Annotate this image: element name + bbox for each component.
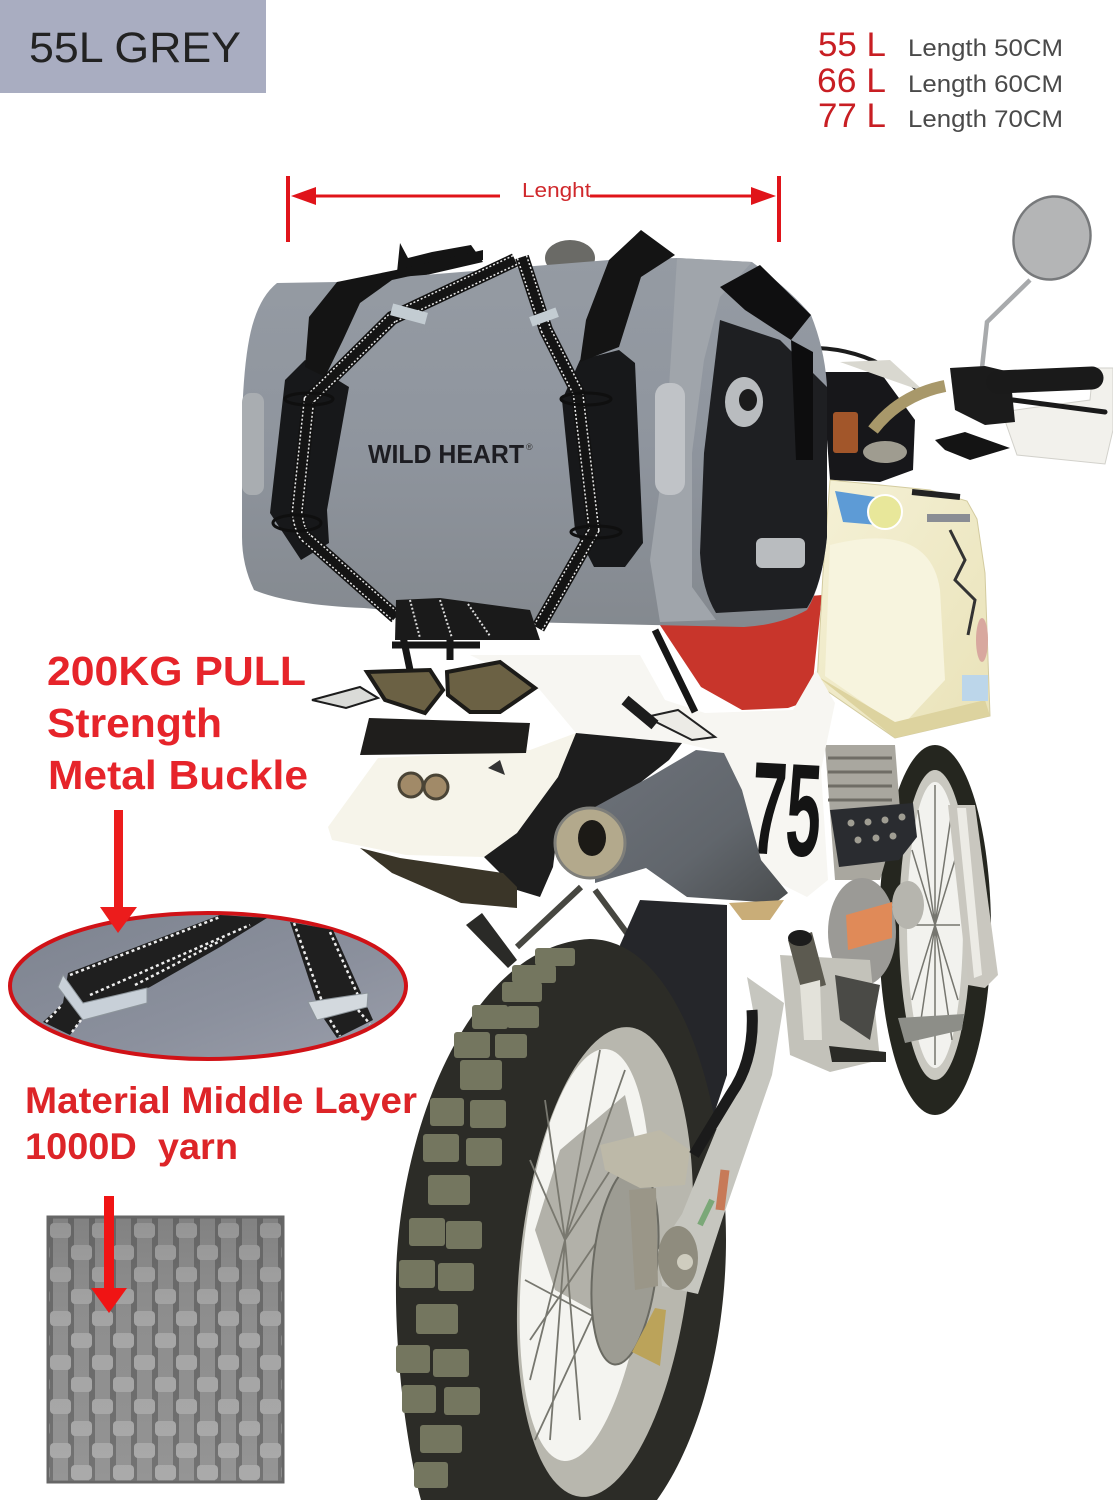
title tag: 55L GREY: 55L GREY bbox=[29, 24, 241, 72]
rear fender underside bbox=[484, 733, 682, 897]
handlebar bbox=[873, 366, 1105, 460]
callout: metal buckle heading: Strength bbox=[47, 700, 222, 746]
callout: material heading: 1000D yarn bbox=[25, 1126, 238, 1167]
rear wheel bbox=[396, 939, 726, 1500]
footpeg bbox=[898, 1014, 964, 1043]
cream fuel tank bbox=[817, 480, 990, 738]
engine bbox=[780, 745, 924, 1072]
arrow to fabric swatch bbox=[91, 1196, 127, 1313]
rear mudguard bbox=[620, 900, 727, 1150]
side window panels bbox=[655, 383, 685, 495]
size list: Length 70CM bbox=[908, 106, 1063, 133]
left top handle bbox=[396, 243, 483, 282]
cord rings bbox=[273, 393, 621, 538]
left handle strap bbox=[305, 250, 483, 377]
size list bbox=[817, 26, 1063, 135]
callout: metal buckle heading: Metal Buckle bbox=[48, 752, 308, 798]
motorcycle bbox=[312, 186, 1113, 1500]
race number 75: 75 bbox=[748, 734, 825, 885]
carrier bracket bbox=[392, 622, 695, 712]
handguard bbox=[1002, 368, 1113, 464]
buckle right bbox=[308, 993, 368, 1020]
size list: 66 L bbox=[817, 62, 886, 100]
arrow to buckle detail bbox=[100, 810, 137, 933]
lower end window bbox=[756, 538, 805, 568]
tail lights bbox=[312, 662, 715, 740]
front fork bbox=[948, 805, 998, 988]
red tank bbox=[650, 595, 822, 710]
brand logo: WILD HEART bbox=[368, 439, 524, 469]
buckle detail oval bbox=[10, 913, 406, 1059]
valve bbox=[725, 377, 763, 427]
product: dry duffel bag bbox=[242, 230, 827, 640]
licence plate holder bbox=[360, 718, 530, 755]
callout: metal buckle heading bbox=[47, 648, 308, 798]
roll-top flap bbox=[720, 265, 811, 340]
front wheel bbox=[879, 745, 991, 1115]
length dimension arrow: Lenght bbox=[522, 180, 592, 202]
side stand and frame bbox=[517, 887, 632, 947]
exhaust muffler bbox=[555, 750, 788, 920]
gauge behind bag bbox=[545, 240, 595, 276]
strap with reflective dots bbox=[43, 915, 267, 1035]
size list: Length 60CM bbox=[908, 71, 1063, 98]
white side panel bbox=[470, 655, 835, 897]
title tag: 55L GREY bbox=[0, 0, 266, 93]
right top handle bbox=[580, 230, 675, 362]
metal buckles bbox=[390, 304, 428, 324]
mirror bbox=[982, 186, 1102, 368]
elastic cords bbox=[297, 257, 594, 628]
swingarm bbox=[658, 977, 784, 1294]
woven fabric swatch bbox=[48, 1217, 283, 1482]
right webbing pad bbox=[562, 350, 643, 567]
light seam band bbox=[650, 258, 752, 622]
length dimension arrow bbox=[286, 176, 781, 242]
right strap bbox=[290, 922, 373, 1038]
size list: Length 50CM bbox=[908, 35, 1063, 62]
size list: 77 L bbox=[818, 97, 886, 135]
callout: material heading bbox=[25, 1080, 417, 1167]
brand logo: ® bbox=[526, 442, 533, 452]
size list: 55 L bbox=[818, 26, 886, 64]
bag body bbox=[242, 258, 827, 627]
callout: metal buckle heading: 200KG PULL bbox=[47, 648, 306, 694]
rear fender bbox=[328, 733, 576, 857]
buckle left bbox=[58, 975, 147, 1020]
callout: material heading: Material Middle Layer bbox=[25, 1080, 417, 1121]
black end panel bbox=[700, 320, 827, 613]
left webbing pad bbox=[270, 360, 349, 560]
lower strap bundle bbox=[395, 598, 540, 640]
headstock bbox=[822, 372, 915, 482]
